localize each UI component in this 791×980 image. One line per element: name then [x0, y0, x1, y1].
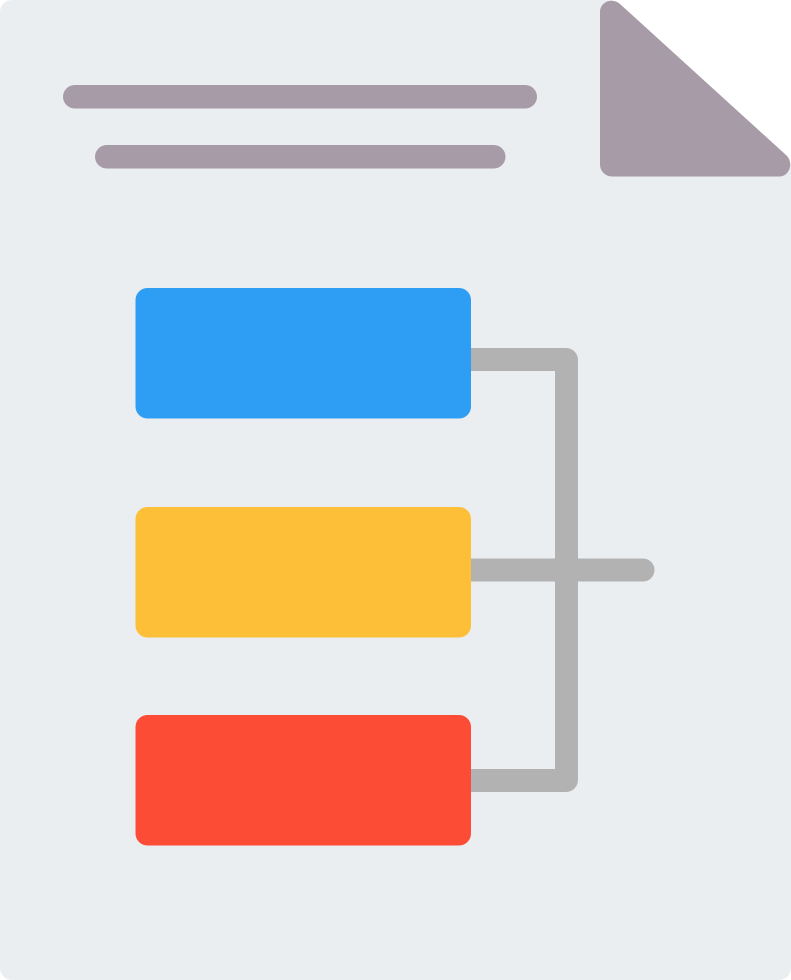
connector lines	[460, 348, 654, 792]
heading line 1	[63, 85, 537, 108]
box: yellow	[136, 507, 471, 638]
box: blue	[136, 288, 471, 418]
heading line 2	[95, 145, 506, 168]
icon: folded corner	[600, 1, 790, 176]
box: red	[136, 715, 471, 846]
